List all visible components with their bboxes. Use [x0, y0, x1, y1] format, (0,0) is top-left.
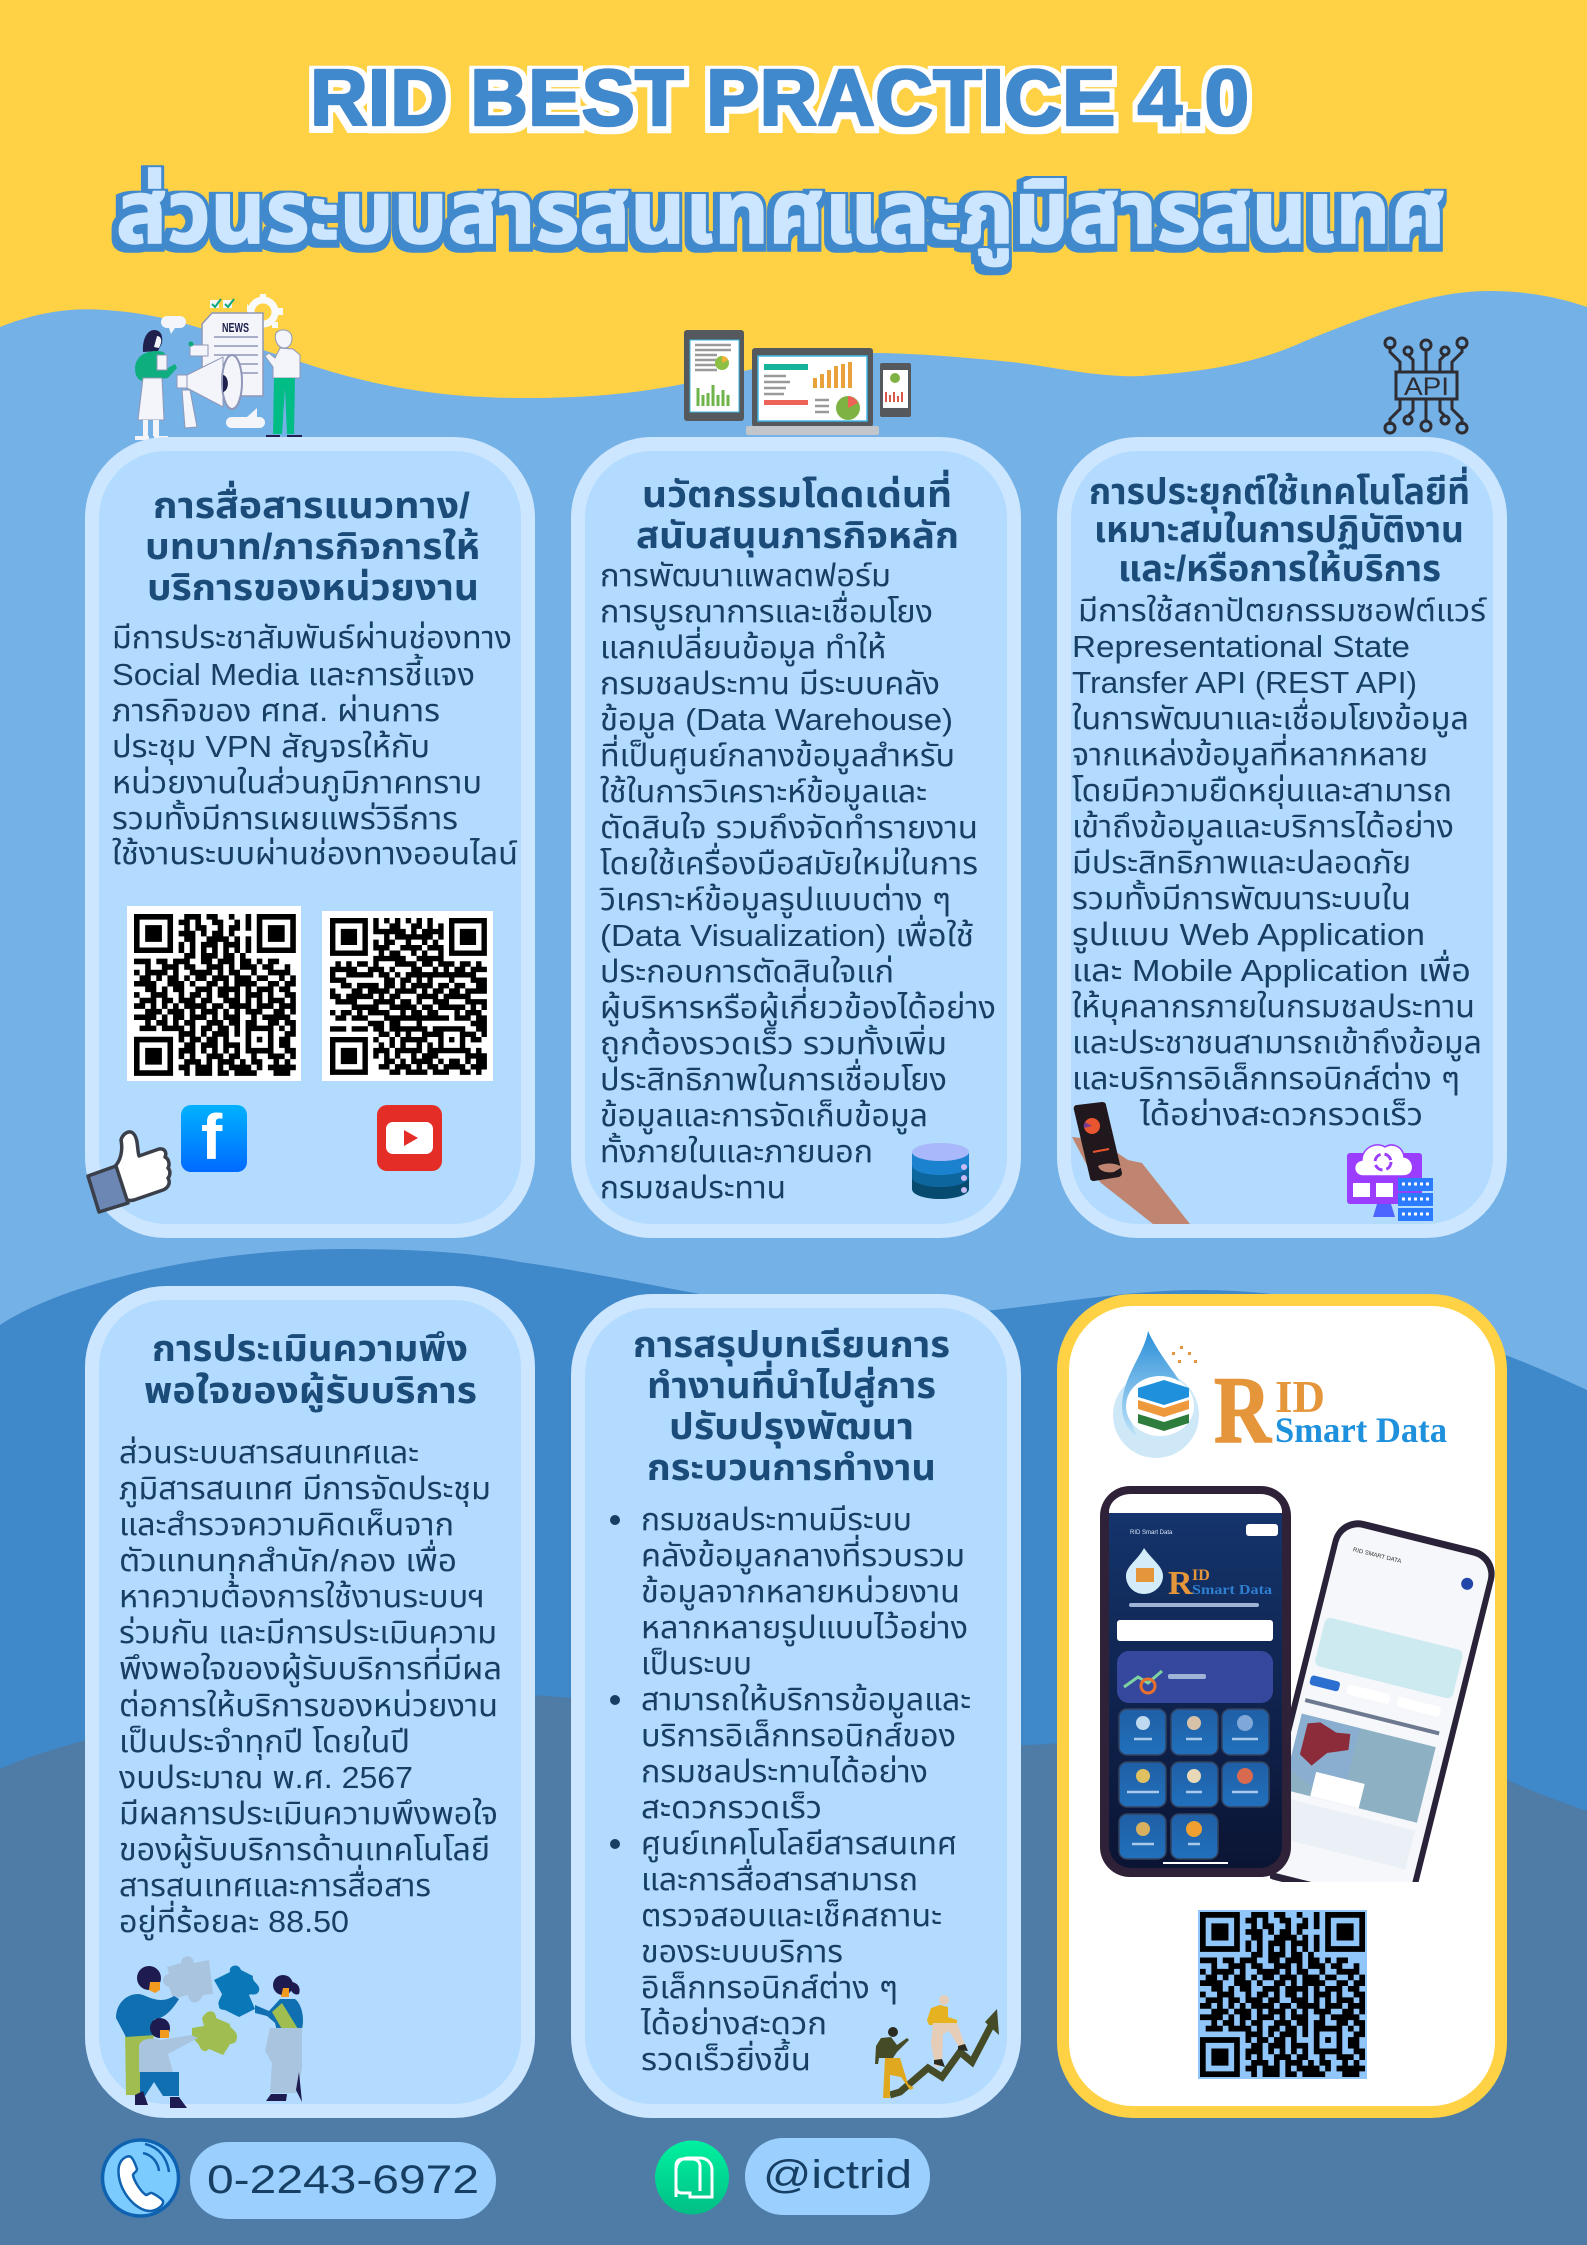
body text: satisfaction: ต่อการให้บริการของหน่วยงาน [119, 1688, 498, 1723]
bullet list: ของระบบบริการ [641, 1934, 843, 1969]
bullet list: กรมชลประทานมีระบบ [641, 1502, 912, 1537]
body text: innovation: ข้อมูลและการจัดเก็บข้อมูล [600, 1098, 928, 1134]
logo text: RID Smart Data: ID [1275, 1371, 1325, 1422]
logo: water drop with data stack [1113, 1331, 1199, 1458]
icon: news and megaphone illustration: NEWS [222, 320, 249, 335]
subtitle: ส่วนระบบสารสนเทศและภูมิสารสนเทศ [116, 163, 1446, 267]
panel: communication [88, 444, 528, 1231]
heading: lessons learned: ทำงานที่นำไปสู่การ [647, 1360, 936, 1407]
heading: communication: บทบาท/ภารกิจการให้ [145, 526, 480, 567]
body text: satisfaction: ร่วมกัน และมีการประเมินความ [119, 1615, 497, 1650]
bullet list: ศูนย์เทคโนโลยีสารสนเทศ [641, 1826, 957, 1862]
heading: technology: และ/หรือการให้บริการ [1118, 548, 1441, 589]
body text: technology: Representational State [1072, 629, 1410, 664]
heading: satisfaction [144, 1328, 477, 1412]
background wave: slate blue [0, 1694, 1587, 2245]
heading: satisfaction: พอใจของผู้รับบริการ [144, 1370, 477, 1412]
icon: LINE [655, 2140, 729, 2214]
phone number pill: 0-2243-6972 [207, 2158, 479, 2202]
heading: communication: การสื่อสารแนวทาง/ [153, 480, 470, 526]
body text: technology: มีประสิทธิภาพและปลอดภัย [1072, 845, 1411, 880]
bullet list: คลังข้อมูลกลางที่รวบรวม [641, 1534, 965, 1574]
bullet list: รวดเร็วยิ่งขึ้น [641, 2038, 811, 2077]
heading: lessons learned: กระบวนการทำงาน [647, 1447, 936, 1488]
panel: lessons learned [578, 1301, 1014, 2111]
body text: satisfaction: ของผู้รับบริการด้านเทคโนโลยี [119, 1832, 490, 1868]
body text: satisfaction: ส่วนระบบสารสนเทศและ [119, 1435, 419, 1470]
body text: innovation: กรมชลประทาน มีระบบคลัง [600, 666, 940, 701]
icon: YouTube [377, 1105, 442, 1171]
heading: technology: เหมาะสมในการปฏิบัติงาน [1094, 509, 1464, 550]
phone mockup: front screen: ID [1192, 1567, 1210, 1584]
panel: technology [1064, 444, 1500, 1231]
icon: cloud server [1347, 1145, 1433, 1221]
background wave: mid blue [0, 1249, 1587, 2245]
body text: technology: ได้อย่างสะดวกรวดเร็ว [1139, 1097, 1423, 1132]
heading: satisfaction: การประเมินความพึง [152, 1328, 468, 1369]
body text: innovation: ใช้ในการวิเคราะห์ข้อมูลและ [600, 774, 927, 810]
body text: satisfaction: พึงพอใจของผู้รับบริการที่มีผล [119, 1647, 502, 1687]
body text: innovation: การพัฒนาแพลตฟอร์ม [600, 558, 891, 593]
icon: hand holding phone [1072, 1102, 1190, 1224]
body text: innovation: ตัดสินใจ รวมถึงจัดทำรายงาน [600, 810, 978, 845]
body text: innovation: แลกเปลี่ยนข้อมูล ทำให้ [600, 626, 886, 666]
bullet list: หลากหลายรูปแบบไว้อย่าง [641, 1610, 968, 1646]
body text: innovation: ที่เป็นศูนย์กลางข้อมูลสำหรับ [600, 734, 955, 774]
body text: innovation [600, 558, 996, 1205]
heading: innovation: นวัตกรรมโดดเด่นที่ [642, 469, 952, 515]
heading: technology: การประยุกต์ใช้เทคโนโลยีที่ [1089, 466, 1470, 513]
body text: communication: มีการประชาสัมพันธ์ผ่านช่องทาง [112, 620, 512, 655]
body text: technology: จากแหล่งข้อมูลที่หลากหลาย [1072, 733, 1428, 773]
body text: innovation: วิเคราะห์ข้อมูลรูปแบบต่าง ๆ [600, 882, 951, 918]
icon: Facebook: f [201, 1101, 223, 1173]
panel: RID Smart Data [1063, 1300, 1501, 2112]
body text: technology: โดยมีความยืดหยุ่นและสามารถ [1072, 773, 1452, 809]
icon: database [912, 1143, 969, 1199]
body text: communication: รวมทั้งมีการเผยแพร่วิธีการ [112, 799, 458, 836]
body text: innovation: ถูกต้องรวดเร็ว รวมทั้งเพิ่ม [600, 1024, 947, 1062]
phone mockup: front screen: R [1168, 1565, 1193, 1602]
body text: innovation: การบูรณาการและเชื่อมโยง [600, 590, 933, 630]
body text: innovation: ประสิทธิภาพในการเชื่อมโยง [600, 1058, 947, 1097]
icon: dashboard devices [684, 330, 911, 435]
body text: technology: และประชาชนสามารถเข้าถึงข้อมูล [1072, 1025, 1482, 1061]
body text: communication: ประชุม VPN สัญจรให้กับ [112, 729, 430, 765]
bullet list: ข้อมูลจากหลายหน่วยงาน [641, 1574, 960, 1610]
logo text: RID Smart Data: Smart Data [1275, 1410, 1447, 1450]
bullet list: สามารถให้บริการข้อมูลและ [641, 1682, 971, 1718]
bullet list: บริการอิเล็กทรอนิกส์ของ [641, 1718, 956, 1753]
bullet list: ได้อย่างสะดวก [640, 2006, 827, 2041]
logo text: RID Smart Data: R [1214, 1357, 1272, 1463]
QR code: Facebook [127, 906, 301, 1081]
heading: communication [145, 480, 480, 608]
QR code: RID Smart Data [1198, 1910, 1367, 2079]
body text: innovation: กรมชลประทาน [600, 1170, 786, 1205]
bullet list: กรมชลประทานได้อย่าง [641, 1754, 928, 1789]
icon: API chip [1385, 338, 1467, 433]
body text: satisfaction: หาความต้องการใช้งานระบบฯ [119, 1579, 485, 1614]
title: RID BEST PRACTICE 4.0 [310, 53, 1249, 142]
body text: communication: Social Media และการชี้แจง [112, 653, 475, 692]
bullet list: และการสื่อสารสามารถ [641, 1858, 918, 1897]
body text: innovation: ข้อมูล (Data Warehouse) [600, 702, 953, 738]
body text: technology: Transfer API (REST API) [1072, 665, 1417, 700]
body text: communication: ใช้งานระบบผ่านช่องทางออนไลน์ [112, 836, 518, 871]
icon: phone [102, 2140, 178, 2216]
bullet list: เป็นระบบ [641, 1646, 752, 1681]
body text: satisfaction: ตัวแทนทุกสำนัก/กอง เพื่อ [119, 1539, 457, 1579]
body text: satisfaction: เป็นประจำทุกปี โดยในปี [119, 1724, 410, 1760]
bullet list [610, 1502, 971, 2077]
body text: innovation: (Data Visualization) เพื่อใช้ [600, 914, 974, 953]
panel: satisfaction [92, 1293, 528, 2111]
QR code: YouTube [322, 911, 493, 1081]
panel: innovation [578, 444, 1014, 1231]
body text: communication [112, 620, 518, 871]
body text: technology: เข้าถึงข้อมูลและบริการได้อย่าง [1072, 809, 1454, 845]
body text: technology: ในการพัฒนาและเชื่อมโยงข้อมูล [1072, 697, 1469, 737]
LINE id pill [745, 2138, 930, 2215]
heading: lessons learned: ปรับปรุงพัฒนา [669, 1406, 914, 1448]
body text: satisfaction: งบประมาณ พ.ศ. 2567 [119, 1760, 413, 1795]
phone number pill [190, 2142, 496, 2219]
body text: technology: และ Mobile Application เพื่อ [1072, 949, 1471, 988]
icon: Facebook [181, 1101, 247, 1173]
icon: team assembling puzzle [116, 1956, 303, 2108]
body text: satisfaction: และสำรวจความคิดเห็นจาก [119, 1507, 454, 1542]
logo text: RID Smart Data [1214, 1357, 1447, 1463]
phone mockup: front screen [1100, 1486, 1291, 1877]
icon: API chip: API [1404, 373, 1449, 401]
body text: technology: มีการใช้สถาปัตยกรรมซอฟต์แวร์ [1078, 593, 1488, 628]
body text: satisfaction: อยู่ที่ร้อยละ 88.50 [119, 1900, 349, 1940]
LINE id pill: @ictrid [763, 2153, 912, 2197]
bullet list: ตรวจสอบและเช็คสถานะ [641, 1898, 942, 1933]
body text: communication: หน่วยงานในส่วนภูมิภาคทราบ [112, 765, 482, 801]
body text: technology: รวมทั้งมีการพัฒนาระบบใน [1072, 879, 1411, 916]
heading: innovation [636, 469, 959, 557]
body text: technology: รูปแบบ Web Application [1072, 917, 1425, 953]
body text: technology [1072, 593, 1488, 1132]
phone mockup: front screen: RID Smart Data [1130, 1530, 1173, 1536]
body text: technology: และบริการอิเล็กทรอนิกส์ต่าง ๆ [1072, 1061, 1460, 1096]
body text: technology: ให้บุคลากรภายในกรมชลประทาน [1072, 989, 1475, 1025]
body text: innovation: โดยใช้เครื่องมือสมัยใหม่ในการ [600, 842, 978, 881]
icon: news and megaphone illustration [135, 294, 302, 440]
phone mockup: rear screen: RID SMART DATA [1352, 1547, 1402, 1565]
icon: thumbs up [88, 1132, 170, 1212]
heading: communication: บริการของหน่วยงาน [147, 567, 479, 608]
body text: innovation: ประกอบการตัดสินใจแก่ [600, 954, 894, 989]
body text: satisfaction: ภูมิสารสนเทศ มีการจัดประชุม [119, 1471, 491, 1507]
body text: satisfaction [119, 1435, 502, 1940]
bullet list: สะดวกรวดเร็ว [641, 1790, 822, 1825]
phone mockup: rear screen [1270, 1520, 1495, 1882]
body text: communication: ภารกิจของ ศทส. ผ่านการ [112, 693, 440, 728]
body text: innovation: ผู้บริหารหรือผู้เกี่ยวข้องได้อย่าง [600, 986, 996, 1026]
body text: satisfaction: สารสนเทศและการสื่อสาร [119, 1864, 431, 1903]
heading: technology [1089, 466, 1470, 589]
heading: lessons learned: การสรุปบทเรียนการ [633, 1324, 950, 1366]
heading: lessons learned [633, 1324, 950, 1488]
bullet list: อิเล็กทรอนิกส์ต่าง ๆ [641, 1970, 898, 2005]
icon: people climbing a rising arrow [875, 1995, 999, 2098]
body text: innovation: ทั้งภายในและภายนอก [600, 1132, 873, 1169]
heading: innovation: สนับสนุนภารกิจหลัก [636, 515, 959, 557]
body text: satisfaction: มีผลการประเมินความพึงพอใจ [119, 1796, 498, 1831]
phone mockup: front screen: Smart Data [1192, 1583, 1272, 1598]
